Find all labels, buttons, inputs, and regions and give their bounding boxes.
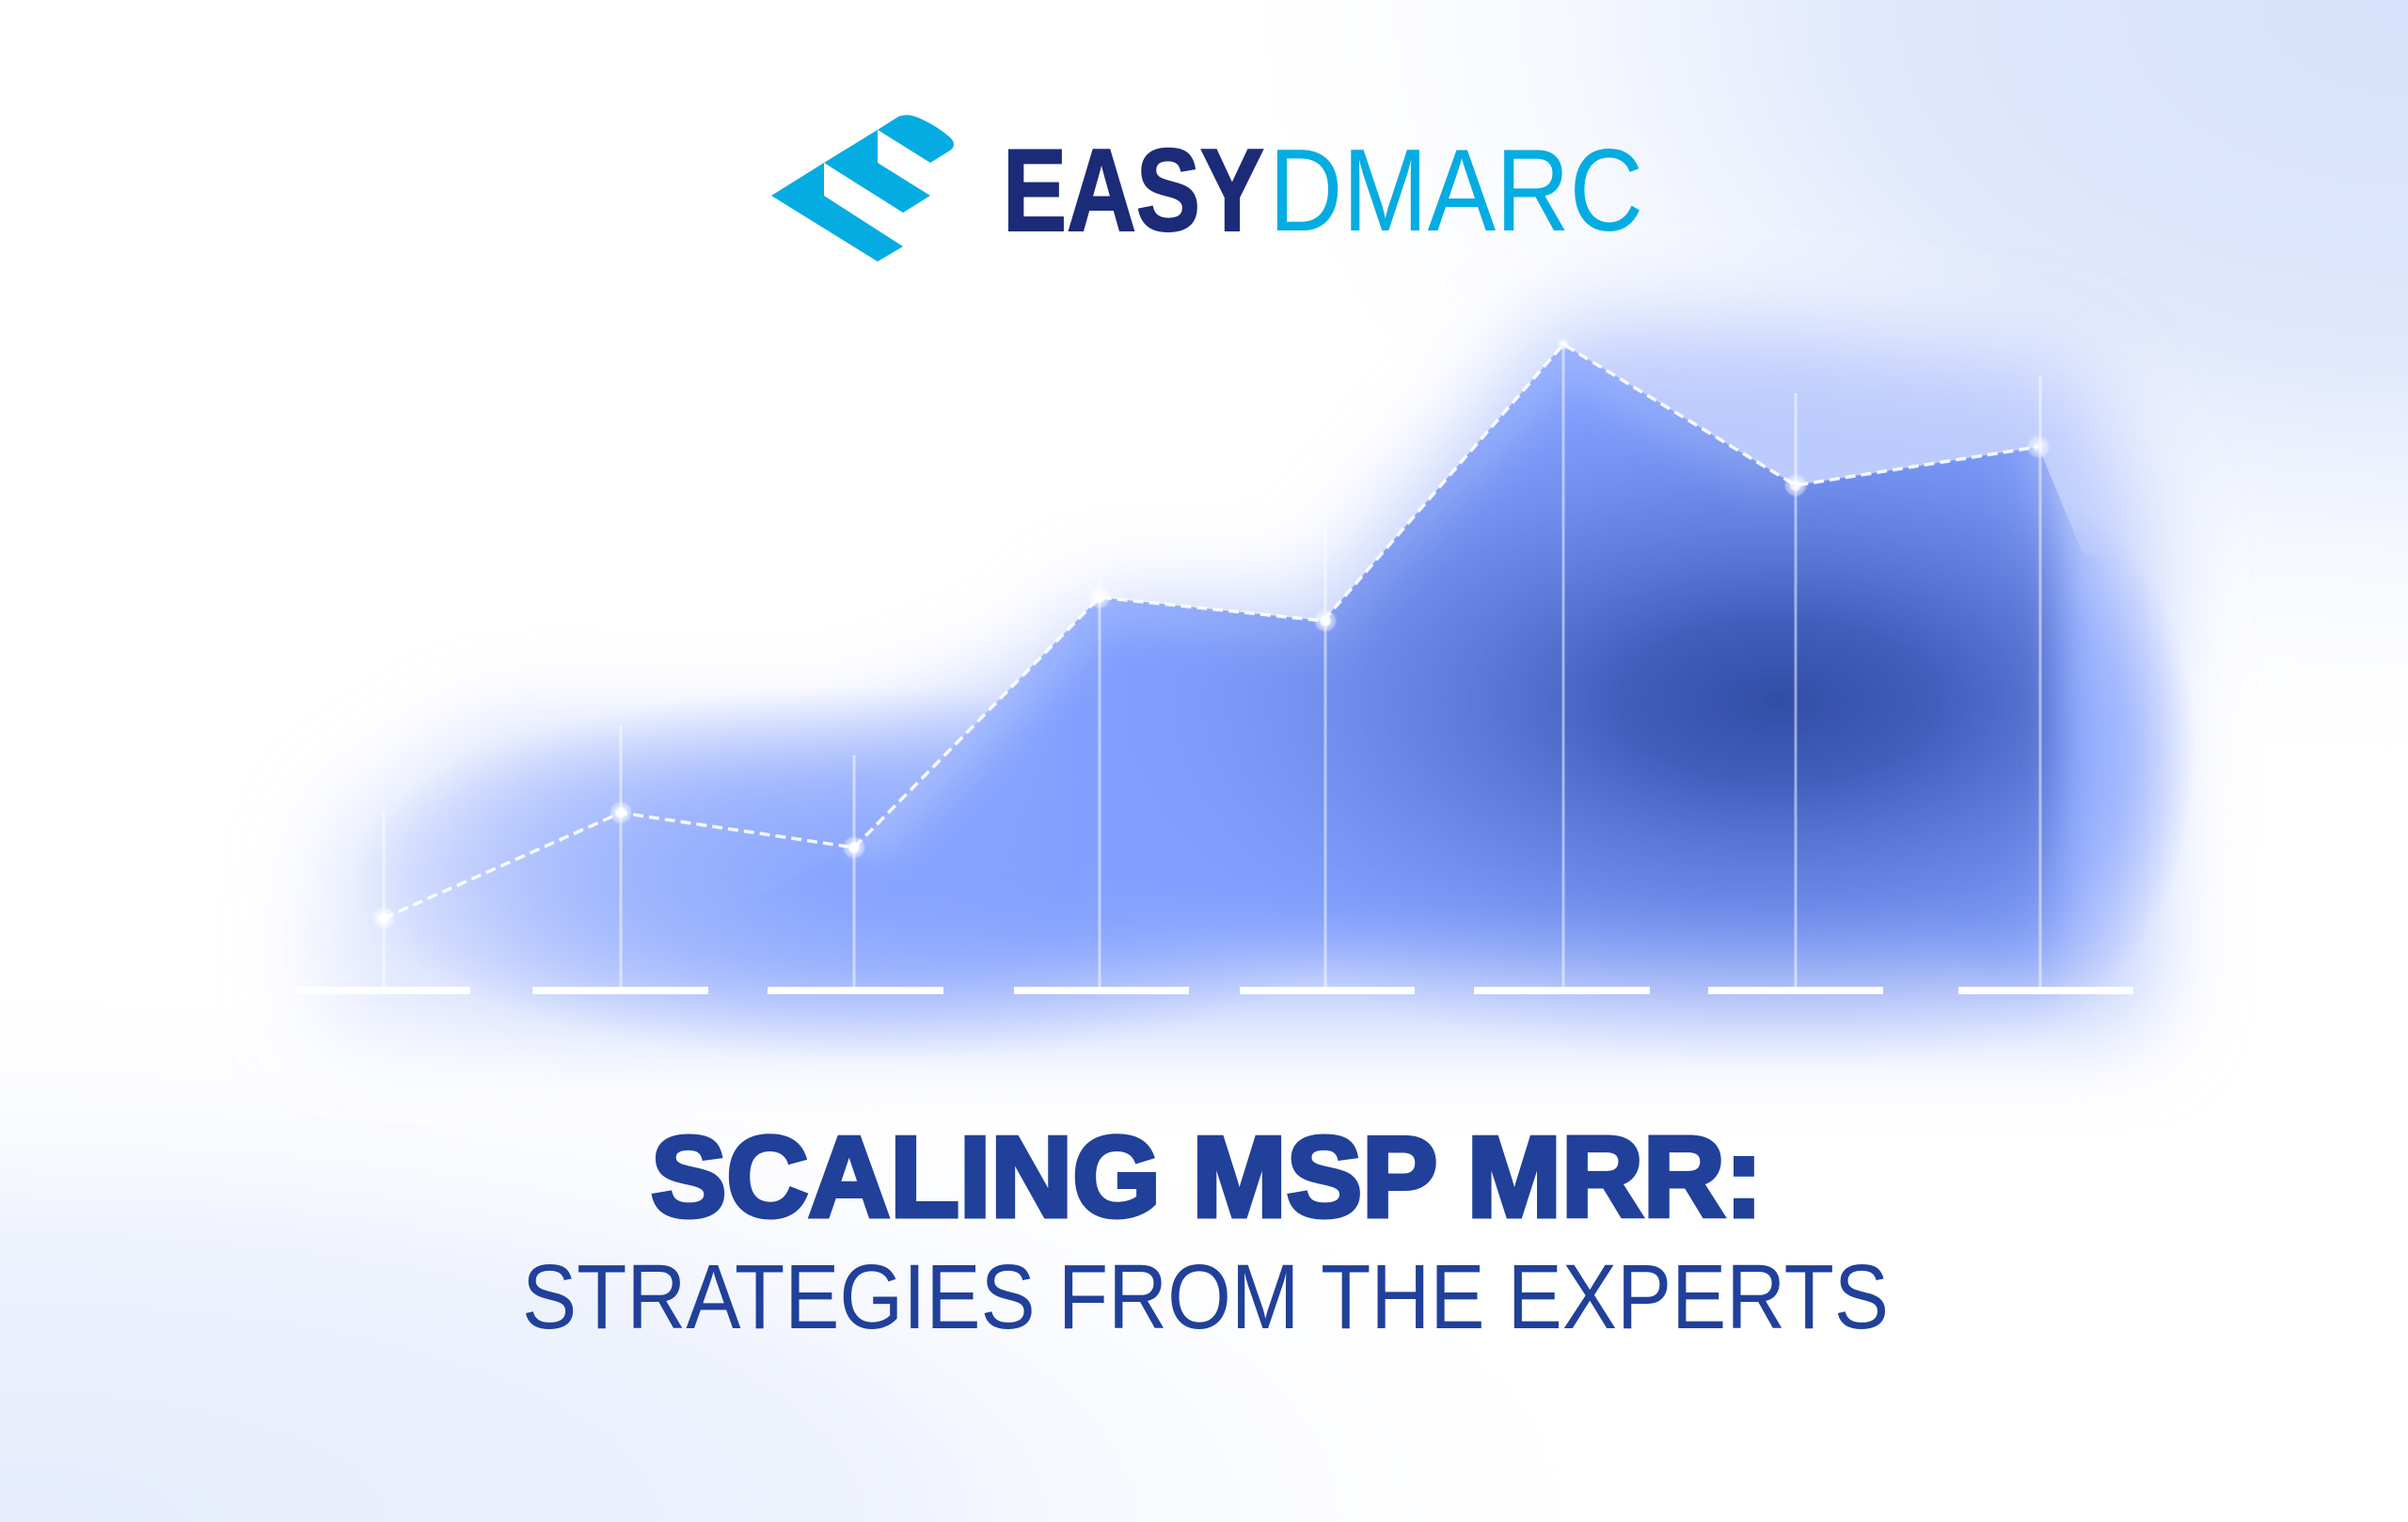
- icon: EasyDMARC mark: [771, 115, 954, 262]
- right bulge: [1886, 499, 2196, 1007]
- vertical guide lines: [384, 344, 2040, 988]
- dashed trend line: [384, 344, 2038, 918]
- title: SCALING MSP MRR:: [651, 1113, 1763, 1241]
- subtitle: STRATEGIES FROM THE EXPERTS: [522, 1245, 1889, 1348]
- logo: [771, 115, 1643, 262]
- logo wordmark: EASY: EASY: [1003, 126, 1264, 256]
- data points: [373, 339, 2049, 928]
- area fill with crisp top edge: [862, 345, 2085, 1047]
- logo wordmark: DMARC: DMARC: [1269, 126, 1643, 256]
- outer glow: [310, 325, 2154, 1025]
- chart: blurred area with dashed trend line: [299, 278, 2204, 1076]
- soft blue on the left of the area: [348, 687, 1402, 1063]
- baseline segments: [295, 987, 2133, 994]
